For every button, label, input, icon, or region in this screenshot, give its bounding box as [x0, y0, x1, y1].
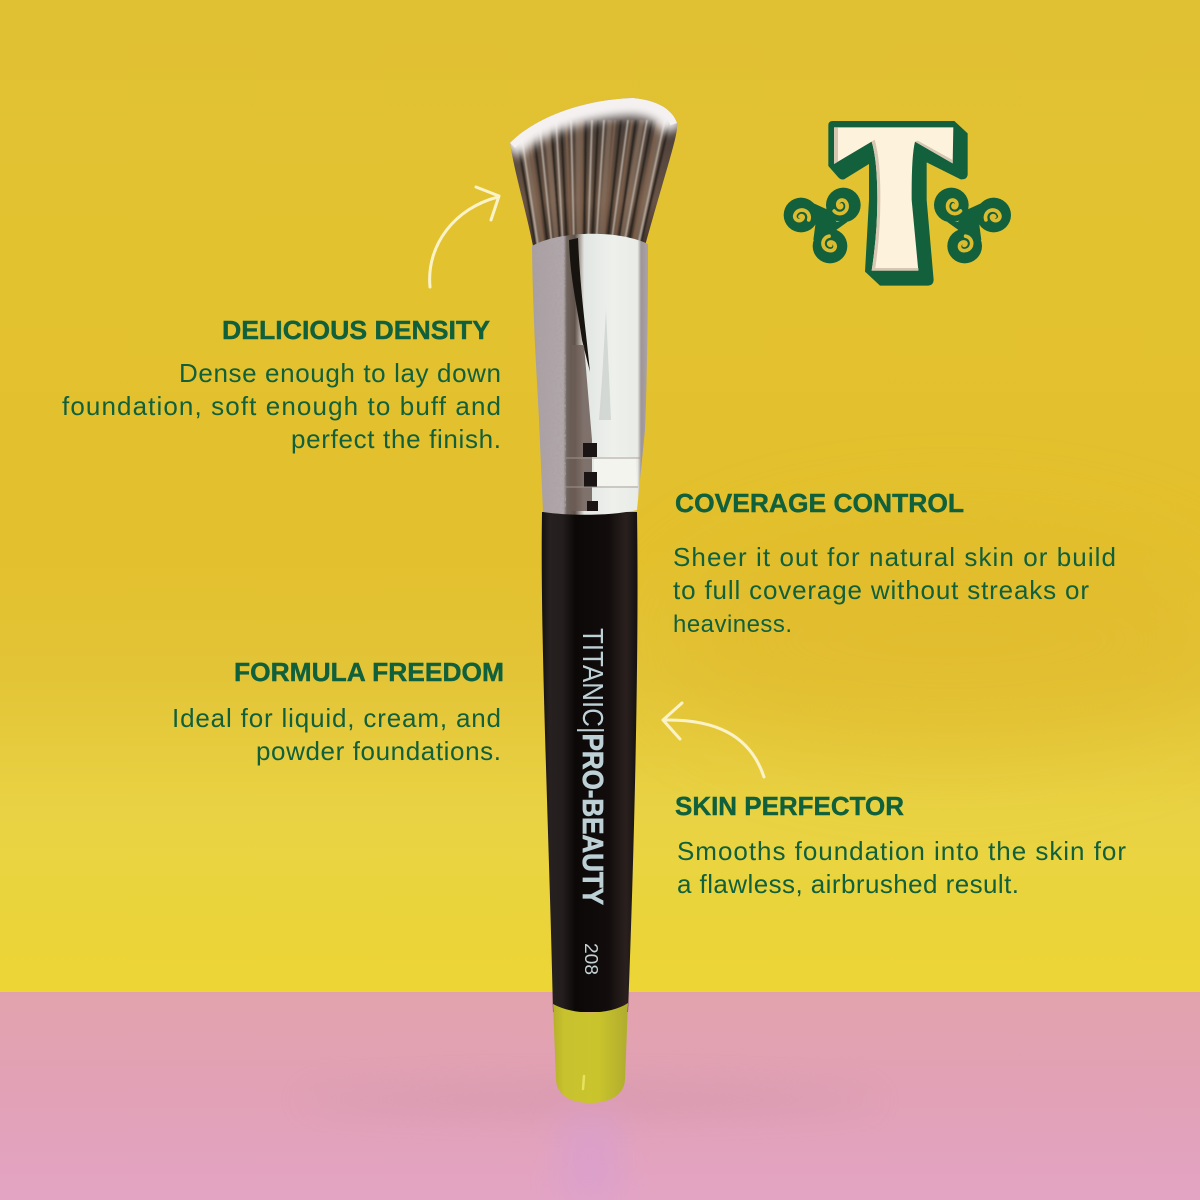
body: coverage control: Sheer it out for natural skin or build	[673, 542, 1116, 572]
body: coverage control	[673, 542, 1116, 638]
body: formula freedom	[172, 703, 501, 766]
body: skin perfector	[677, 836, 1126, 899]
heading: formula freedom: FORMULA FREEDOM	[234, 657, 504, 687]
brush model number: 208	[581, 943, 601, 975]
callout: formula freedom	[172, 657, 504, 766]
callout: delicious density	[62, 315, 501, 454]
body: delicious density: foundation, soft enough to buff and	[62, 391, 501, 421]
brush handle brand text: TITANIC|PRO-BEAUTY	[576, 628, 608, 905]
body: skin perfector: a flawless, airbrushed result.	[677, 869, 1019, 899]
body: delicious density	[62, 358, 501, 454]
heading: skin perfector: SKIN PERFECTOR	[675, 791, 904, 821]
callout: skin perfector	[675, 791, 1126, 899]
logo right triskele	[934, 188, 1011, 263]
pink tabletop	[0, 992, 1200, 1200]
heading: delicious density: DELICIOUS DENSITY	[222, 315, 490, 345]
brush illustration	[505, 95, 683, 1103]
body: delicious density: Dense enough to lay down	[179, 358, 501, 388]
body: skin perfector: Smooths foundation into the skin for	[677, 836, 1126, 866]
logo: T with triskele spirals	[784, 121, 1011, 286]
logo left triskele	[784, 188, 861, 263]
body: formula freedom: Ideal for liquid, cream, and	[172, 703, 501, 733]
heading: coverage control: COVERAGE CONTROL	[675, 488, 964, 518]
body: delicious density: perfect the finish.	[291, 424, 501, 454]
body: coverage control: heaviness.	[673, 611, 792, 638]
logo letter T	[828, 121, 968, 286]
arrow: to handle	[663, 703, 764, 777]
body: formula freedom: powder foundations.	[256, 736, 501, 766]
body: coverage control: to full coverage without streaks or	[673, 575, 1089, 605]
arrow: to bristles	[430, 187, 499, 287]
callout: coverage control	[673, 488, 1116, 638]
brush handle	[542, 512, 638, 1012]
brush bristles	[505, 95, 683, 247]
brush lime tip	[553, 1003, 628, 1103]
brush metal ferrule	[532, 234, 648, 515]
